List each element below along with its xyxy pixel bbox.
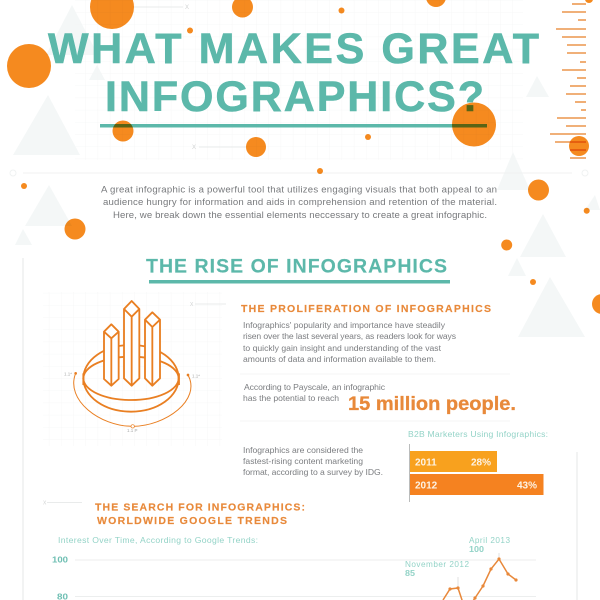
paragraph: popularity: amounts of data and information available to them. xyxy=(243,354,436,364)
text: fastest-rising: format, according to a survey by IDG. xyxy=(243,467,383,477)
line chart: Google Trends: November 2012 xyxy=(405,560,469,569)
section frame xyxy=(23,258,577,600)
icon: bar columns on a circular base: 1.1* xyxy=(64,372,72,376)
bar chart: B2B marketers: 2012 xyxy=(415,480,438,492)
bar chart: B2B marketers: 28% xyxy=(471,458,491,468)
bar chart: B2B marketers: B2B Marketers Using Infographics: xyxy=(408,429,548,439)
icon: bar columns on a circular base xyxy=(43,292,222,446)
divider xyxy=(240,420,510,422)
heading: search trends: THE SEARCH FOR INFOGRAPHICS: xyxy=(95,502,305,514)
intro text: audience hungry for information and aids in comprehension and retention of the material. xyxy=(103,197,497,208)
divider xyxy=(240,373,510,375)
orange dots xyxy=(7,0,600,314)
section heading: THE RISE OF INFOGRAPHICS xyxy=(146,256,447,278)
axis callouts: X xyxy=(185,5,189,11)
intro text: Here, we break down the essential elements neccessary to create a great infographic. xyxy=(113,210,487,221)
axis callouts: X xyxy=(192,145,196,151)
intro text: A great infographic is a powerful tool that utilizes engaging visuals that both appeal to an xyxy=(101,184,497,196)
paragraph: popularity: risen over the last several years, as readers look for ways xyxy=(243,331,456,341)
line chart: Google Trends: 100 xyxy=(52,554,68,564)
text: fastest-rising: fastest-rising content marketing xyxy=(243,456,363,466)
line chart: Google Trends: 100 xyxy=(469,545,484,554)
paragraph: popularity xyxy=(243,320,456,364)
callout line: X xyxy=(43,500,47,506)
title underline xyxy=(100,124,487,128)
line chart: Google Trends: April 2013 xyxy=(469,536,510,545)
bar chart: B2B marketers: 43% xyxy=(517,480,537,492)
title: INFOGRAPHICS? xyxy=(105,73,484,121)
callout line xyxy=(43,500,82,506)
header grid xyxy=(10,0,588,176)
callout line: X xyxy=(190,302,194,308)
heading: proliferation: THE PROLIFERATION OF INFOGRAPHICS xyxy=(241,303,491,315)
text: Payscale: According to Payscale, an infographic xyxy=(244,382,386,392)
text: fastest-rising xyxy=(243,445,383,477)
callout line xyxy=(190,302,226,308)
line chart: Google Trends: Interest Over Time, According to Google Trends: xyxy=(58,535,258,545)
paragraph: popularity: Infographics' popularity and importance have steadily xyxy=(243,320,446,330)
heading: search trends xyxy=(95,502,305,527)
bar chart: B2B marketers: 2011 xyxy=(415,458,437,468)
section heading underline xyxy=(149,280,450,284)
intro text xyxy=(101,184,497,221)
bar chart: B2B marketers xyxy=(408,429,548,502)
paragraph: popularity: to quickly gain insight and understanding of the vast xyxy=(243,343,442,353)
background triangles xyxy=(13,5,600,337)
ruler ticks xyxy=(550,4,586,158)
text: Payscale xyxy=(243,382,386,403)
stat: 15 million people: 15 million people. xyxy=(348,393,516,415)
title: WHAT MAKES GREAT xyxy=(48,25,539,73)
line chart: Google Trends: 85 xyxy=(405,569,415,578)
text: fastest-rising: Infographics are considered the xyxy=(243,445,363,455)
line chart: Google Trends xyxy=(52,535,536,600)
text: Payscale: has the potential to reach xyxy=(243,393,339,403)
axis callouts xyxy=(134,5,246,151)
icon: bar columns on a circular base: 1.1* xyxy=(192,374,200,378)
heading: search trends: WORLDWIDE GOOGLE TRENDS xyxy=(97,515,287,527)
title xyxy=(48,25,539,121)
icon: bar columns on a circular base: 1.1 P xyxy=(127,428,138,433)
